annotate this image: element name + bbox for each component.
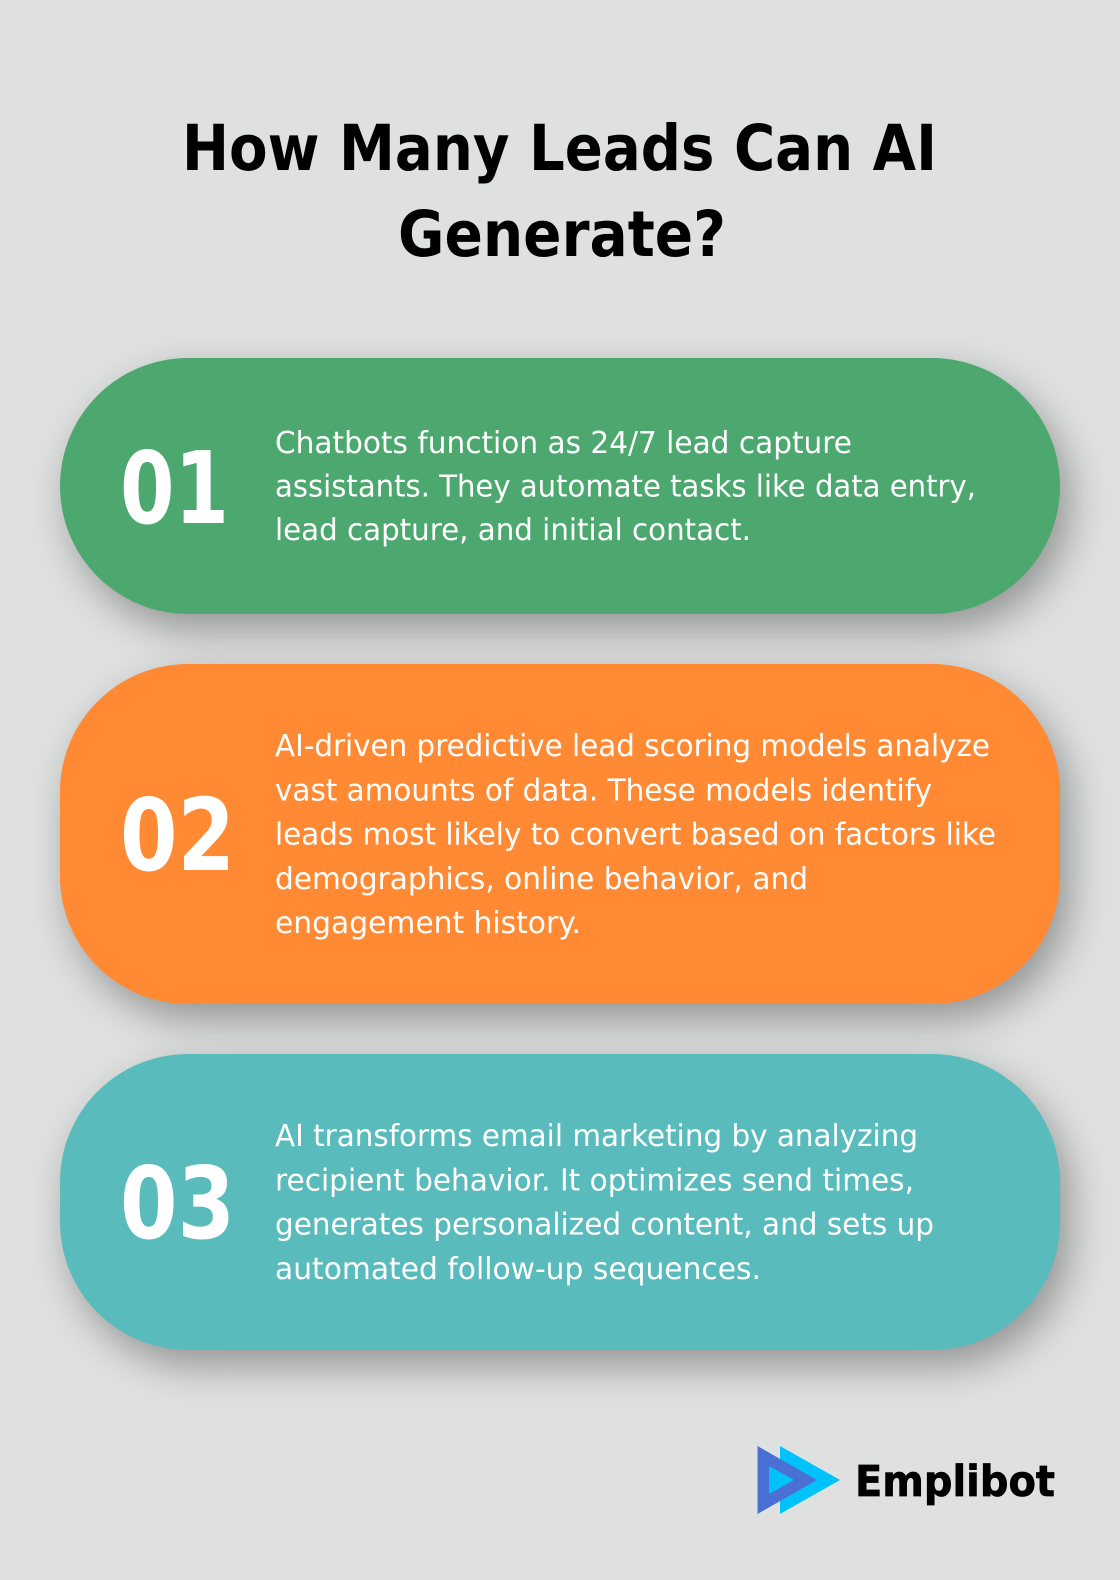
- panel: step 02: [60, 664, 1060, 1004]
- text: step 02 description: AI-driven predictive lead scoring models analyze: [275, 729, 990, 764]
- text: step 02 description: [275, 729, 996, 941]
- number 02: 02: [120, 777, 235, 894]
- logo: Emplibot: [758, 1446, 1055, 1514]
- panel: step 01: [60, 358, 1060, 614]
- title: Generate?: [398, 198, 726, 271]
- text: step 03 description: [275, 1119, 934, 1287]
- text: step 02 description: leads most likely to convert based on factors like: [275, 818, 996, 852]
- number 03: 03: [120, 1145, 235, 1262]
- text: step 01 description: lead capture, and initial contact.: [275, 513, 751, 548]
- panel: step 03: [60, 1054, 1060, 1350]
- text: step 02 description: engagement history.: [275, 906, 581, 941]
- text: step 03 description: recipient behavior. It optimizes send times,: [275, 1163, 914, 1198]
- number 01: 01: [120, 430, 229, 547]
- text: step 01 description: assistants. They automate tasks like data entry,: [275, 470, 976, 504]
- text: step 03 description: generates personalized content, and sets up: [275, 1208, 934, 1243]
- title: [182, 112, 937, 271]
- text: step 03 description: automated follow-up sequences.: [275, 1252, 761, 1287]
- title: How Many Leads Can AI: [182, 112, 937, 185]
- text: step 02 description: demographics, online behavior, and: [275, 862, 808, 897]
- text: step 01 description: Chatbots function as 24/7 lead capture: [275, 426, 852, 461]
- icon: play triangles: [758, 1446, 840, 1514]
- logo wordmark: Emplibot: [855, 1457, 1055, 1507]
- text: step 01 description: [275, 426, 976, 548]
- text: step 02 description: vast amounts of data. These models identify: [275, 773, 932, 808]
- text: step 03 description: AI transforms email marketing by analyzing: [275, 1119, 918, 1154]
